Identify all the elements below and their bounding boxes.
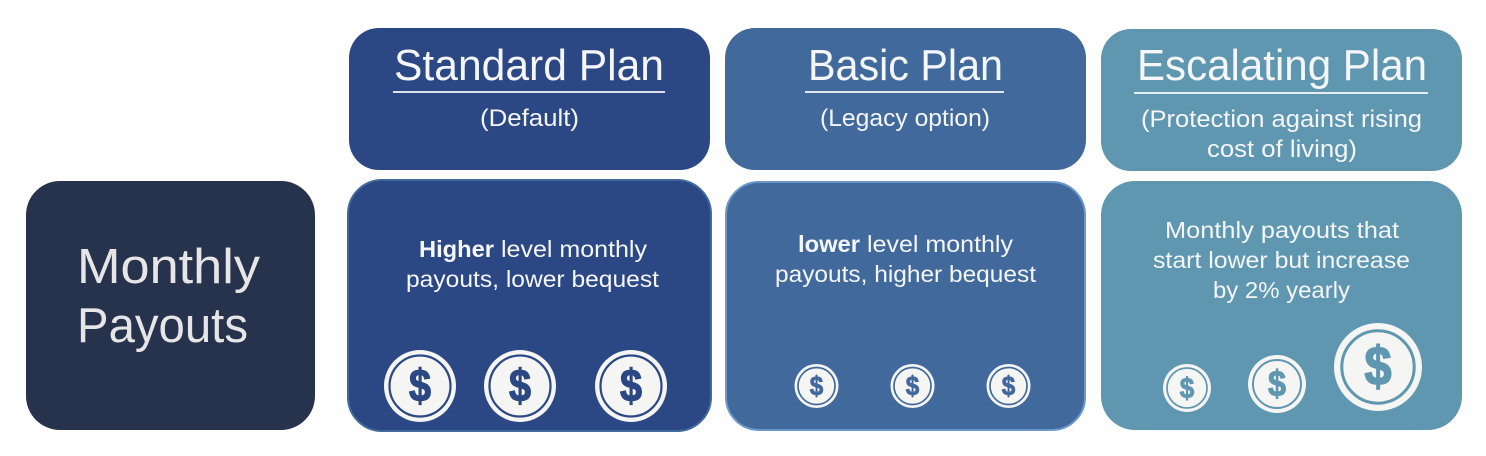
text: basic plan description: payouts, higher bequest: [775, 261, 1037, 287]
icon: dollar coin 3: $: [620, 360, 642, 411]
text: basic plan description: [775, 231, 1037, 287]
icon: dollar coin 1: [384, 350, 456, 422]
panel: basic plan header: Basic Plan: [808, 41, 1003, 90]
panel: basic plan header: [725, 28, 1086, 170]
panel: escalating plan header: (Protection against rising: [1141, 106, 1422, 133]
panel: monthly payouts row label: Payouts: [77, 299, 248, 353]
icon: dollar coin 1: $: [810, 371, 823, 401]
panel: monthly payouts row label: [26, 181, 315, 430]
text: standard plan description: [406, 236, 660, 292]
text: standard plan description: level monthly: [501, 236, 648, 262]
icon: large dollar coin: $: [1364, 335, 1392, 397]
icon: medium dollar coin: $: [1268, 363, 1286, 404]
text: basic plan description: level monthly: [867, 231, 1014, 257]
panel: basic plan header: (Legacy option): [820, 105, 990, 132]
panel: standard plan details: [348, 180, 711, 431]
icon: dollar coin 2: $: [509, 360, 531, 411]
text: escalating plan description: by 2% yearly: [1213, 277, 1351, 303]
panel: monthly payouts row label: Monthly: [77, 240, 261, 294]
text: escalating plan description: Monthly payouts that: [1165, 217, 1400, 243]
text: basic plan description: lower: [798, 231, 860, 257]
icon: dollar coin 2: [890, 364, 934, 408]
text: escalating plan description: start lower but increase: [1153, 247, 1410, 273]
icon: medium dollar coin: [1248, 355, 1306, 413]
icon: dollar coin 1: [794, 364, 838, 408]
text: standard plan description: Higher: [419, 236, 494, 262]
icon: small dollar coin: [1163, 364, 1211, 412]
icon: dollar coin 2: [484, 350, 556, 422]
icon: large dollar coin: [1334, 323, 1422, 411]
icon: small dollar coin: $: [1180, 373, 1194, 405]
panel: escalating plan details: [1101, 181, 1462, 430]
panel: standard plan header: Standard Plan: [394, 41, 664, 90]
icon: dollar coin 3: $: [1002, 371, 1015, 401]
panel: standard plan header: (Default): [480, 105, 579, 132]
icon: dollar coin 3: [986, 364, 1030, 408]
text: escalating plan description: [1153, 217, 1410, 303]
panel: standard plan header: [349, 28, 710, 170]
icon: dollar coin 3: [595, 350, 667, 422]
panel: escalating plan header: Escalating Plan: [1137, 41, 1427, 90]
icon: dollar coin 1: $: [409, 360, 431, 411]
icon: dollar coin 2: $: [906, 371, 919, 401]
panel: basic plan details: [726, 182, 1085, 430]
panel: escalating plan header: [1101, 29, 1462, 171]
text: standard plan description: payouts, lower bequest: [406, 266, 660, 292]
panel: escalating plan header: cost of living): [1207, 136, 1357, 163]
